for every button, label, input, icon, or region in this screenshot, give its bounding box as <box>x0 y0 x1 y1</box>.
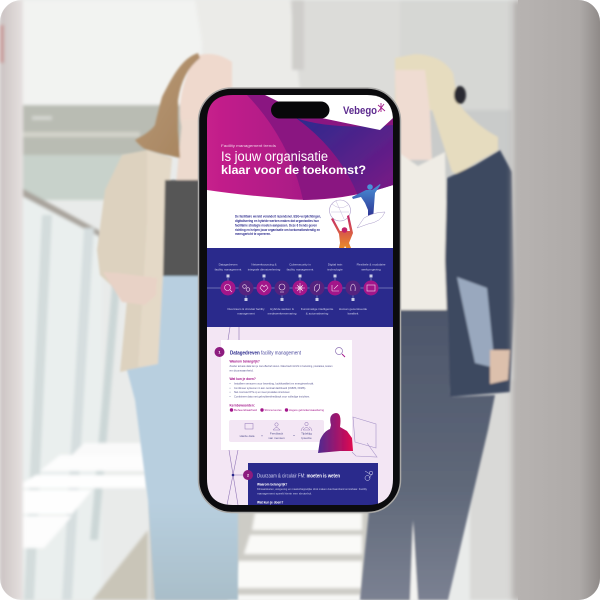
logo: Vebego: Vebego <box>343 105 377 117</box>
intro text <box>235 214 321 236</box>
intro text: mensgericht te opereren. <box>235 232 271 236</box>
card 1: Datagedreven facility management: • <box>230 386 231 390</box>
card 1: Datagedreven facility management: Stel concrete KPI's op en meet prestaties structureel. <box>234 390 290 394</box>
illustration: person at computer <box>318 413 377 457</box>
card 1: Datagedreven facility management: Combineer data met gebruikersfeedback voor volledige inzichten. <box>234 394 310 398</box>
connector lines <box>226 327 243 505</box>
timeline band: Kunstmatige intelligentie <box>301 307 334 311</box>
timeline band: management <box>237 312 255 316</box>
intro text: De facilitaire wereld verandert razendsnel. ESG-verplichtingen, <box>235 214 321 218</box>
card 1: Datagedreven facility management: 1 <box>218 350 221 354</box>
card 1: Datagedreven facility management <box>214 340 352 450</box>
card 1: Datagedreven facility management: Zonder actuele data kun je niet effectief sturen. Data biedt inzicht in bezetting, prestaties, kosten <box>230 364 333 368</box>
card 1: Datagedreven facility management: Harde data <box>240 434 255 438</box>
illustration: figures with globe and paper plane <box>330 184 385 253</box>
phone screen <box>207 95 393 505</box>
card 2: Duurzaam & circulair FM: Duurzaam & circulair FM: moeten is weten <box>257 474 340 480</box>
timeline band: medewerkerservaring <box>268 312 297 316</box>
timeline band: facility management <box>287 268 314 272</box>
timeline band: Flexibele & modulaire <box>357 262 386 266</box>
card 2: Duurzaam & circulair FM: Waarom belangrijk? <box>257 482 287 486</box>
timeline band: Human gecentreerde <box>339 307 367 311</box>
timeline band: & automatisering <box>306 312 329 316</box>
timeline band: Hybride werken & <box>270 307 294 311</box>
card 1: Datagedreven facility management: en duurzaamheid. <box>230 368 254 372</box>
hero title: Facility management trends <box>221 143 276 148</box>
card 1: Datagedreven facility management: • <box>230 390 231 394</box>
timeline band: Netwerksourcing & <box>251 262 277 266</box>
timeline band: integrale dienstverlening <box>248 268 281 272</box>
timeline band: werkomgeving <box>361 268 381 272</box>
phone notch <box>271 102 330 118</box>
card 1: Datagedreven facility management: • <box>230 394 231 398</box>
timeline band: Duurzaam & circulair facility <box>227 307 265 311</box>
hero title: klaar voor de toekomst? <box>221 165 366 177</box>
card 2: Duurzaam & circulair FM: management speelt hierin een sleutelrol. <box>257 492 312 496</box>
timeline band: technologie <box>327 268 343 272</box>
intro text: facilitaire strategie moeten aanpassen. Deze 6 trends geven <box>235 224 317 228</box>
card 1: Datagedreven facility management: Datagedreven facility management <box>230 350 301 356</box>
card 1: Datagedreven facility management: Kernbewoorden: <box>230 404 255 408</box>
card 1: Datagedreven facility management: Waarom belangrijk? <box>230 360 260 364</box>
card 1: Datagedreven facility management: Tijdelijig <box>301 432 312 436</box>
card 1: Datagedreven facility management: van mensen <box>268 436 285 440</box>
hero banner <box>207 95 393 200</box>
card 1: Datagedreven facility management: Slimme keuzes <box>264 408 282 412</box>
pink lower section <box>207 327 393 505</box>
card 2: Duurzaam & circulair FM <box>232 463 378 505</box>
timeline band: Cybersecurity in <box>289 262 311 266</box>
timeline band: Digital twin <box>328 262 343 266</box>
card 2: Duurzaam & circulair FM: 2 <box>247 472 250 478</box>
timeline band: facility management <box>215 268 242 272</box>
card 1: Datagedreven facility management: Beheersbaarheid <box>234 408 257 412</box>
card 1: Datagedreven facility management: • <box>230 382 231 386</box>
card 2: Duurzaam & circulair FM: Wat kun je doen? <box>257 500 283 504</box>
timeline band: Datagedreven <box>219 262 238 266</box>
card 1: Datagedreven facility management: Ipsectie <box>301 436 312 440</box>
timeline band: kwaliteit <box>348 312 359 316</box>
card 1: Datagedreven facility management: Combineer systemen in één centraal dashboard (CMMS, IWMS). <box>234 386 306 390</box>
card 1: Datagedreven facility management: Installeer sensoren voor bezetting, luchtkwaliteit en energieverbruik. <box>234 382 314 386</box>
timeline band <box>207 248 393 327</box>
card 1: Datagedreven facility management: = <box>293 434 295 438</box>
hero title <box>221 144 366 174</box>
intro text: richting en helpen jouw organisatie om toekomstbestendig en <box>235 228 320 232</box>
card 1: Datagedreven facility management: Feedback <box>270 432 284 436</box>
card 1: Datagedreven facility management: Hogere gebruikerswaardering <box>289 408 324 412</box>
card 1: Datagedreven facility management: + <box>261 434 263 438</box>
card 1: Datagedreven facility management: Wat kun je doen? <box>230 377 256 381</box>
hero title: Is jouw organisatie <box>221 149 328 164</box>
card 2: Duurzaam & circulair FM: Klimaatdoelen, wetgeving en maatschappelijke druk maken duurzaamheid onmisbaar. Facility <box>257 487 367 491</box>
phone body <box>198 88 400 512</box>
intro text: digitalisering en hybride werken maken dat organisaties hun <box>235 219 319 223</box>
